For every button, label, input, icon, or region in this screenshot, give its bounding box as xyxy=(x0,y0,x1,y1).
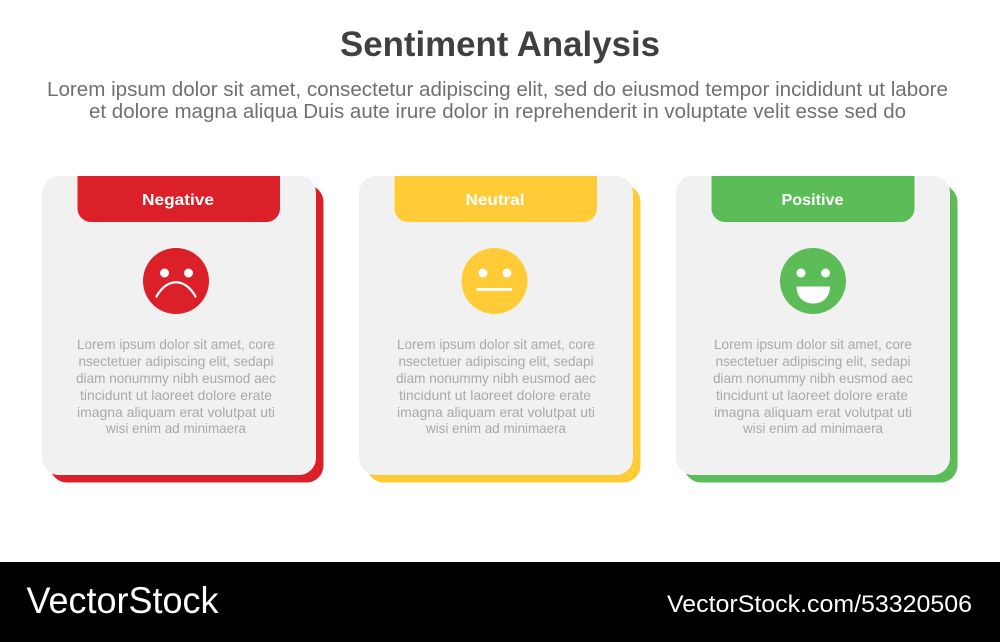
body text: positive: Lorem ipsum dolor sit amet, core xyxy=(714,336,912,352)
subtitle text xyxy=(47,79,948,123)
body text: negative: tincidunt ut laoreet dolore erate xyxy=(80,387,272,403)
card body: neutral xyxy=(359,176,633,475)
title: Sentiment Analysis xyxy=(340,25,660,64)
card shadow: negative xyxy=(50,185,324,482)
footer image id: VectorStock.com/53320506 xyxy=(667,591,972,618)
body text: negative: Lorem ipsum dolor sit amet, core xyxy=(77,336,275,352)
body text: negative: diam nonummy nibh eusmod aec xyxy=(76,370,276,386)
panel: positive xyxy=(676,176,958,482)
body text: negative: imagna aliquam erat volutpat uti xyxy=(77,404,275,420)
body text: neutral: Lorem ipsum dolor sit amet, core xyxy=(397,336,595,352)
icon: neutral face xyxy=(462,248,528,314)
subtitle text: Lorem ipsum dolor sit amet, consectetur adipiscing elit, sed do eiusmod tempor incididunt ut labore xyxy=(47,79,948,101)
icon: happy face xyxy=(780,248,846,314)
body text: positive: diam nonummy nibh eusmod aec xyxy=(713,370,913,386)
tab: negative xyxy=(78,176,280,222)
subtitle text: et dolore magna aliqua Duis aute irure dolor in reprehenderit in voluptate velit esse sed do xyxy=(89,101,906,123)
body text: neutral: nsectetuer adipiscing elit, sedapi xyxy=(398,353,594,369)
body text: negative: wisi enim ad minimaera xyxy=(105,420,246,436)
body text: neutral: imagna aliquam erat volutpat uti xyxy=(397,404,595,420)
heading: neutral: Neutral xyxy=(466,192,524,209)
card body: negative xyxy=(42,176,316,475)
body text: neutral: diam nonummy nibh eusmod aec xyxy=(396,370,596,386)
body text: positive: tincidunt ut laoreet dolore erate xyxy=(716,387,908,403)
card shadow: positive xyxy=(684,185,958,482)
body text: negative xyxy=(76,336,276,436)
body text: neutral xyxy=(396,336,596,436)
icon: sad face xyxy=(143,248,209,314)
heading: positive: Positive xyxy=(782,192,844,209)
card body: positive xyxy=(676,176,950,475)
tab: positive xyxy=(712,176,914,222)
body text: positive: wisi enim ad minimaera xyxy=(742,420,883,436)
footer logo text: VectorStock xyxy=(26,580,219,621)
body text: neutral: tincidunt ut laoreet dolore erate xyxy=(399,387,591,403)
footer bar xyxy=(0,562,1000,642)
heading: negative: Negative xyxy=(142,192,214,209)
panel: negative xyxy=(42,176,324,482)
tab: neutral xyxy=(394,176,597,222)
body text: positive: imagna aliquam erat volutpat uti xyxy=(714,404,912,420)
body text: positive: nsectetuer adipiscing elit, sedapi xyxy=(716,353,910,369)
body text: positive xyxy=(713,336,913,436)
panel: neutral xyxy=(359,176,640,482)
body text: neutral: wisi enim ad minimaera xyxy=(425,420,566,436)
card shadow: neutral xyxy=(367,185,640,482)
body text: negative: nsectetuer adipiscing elit, sedapi xyxy=(78,353,274,369)
